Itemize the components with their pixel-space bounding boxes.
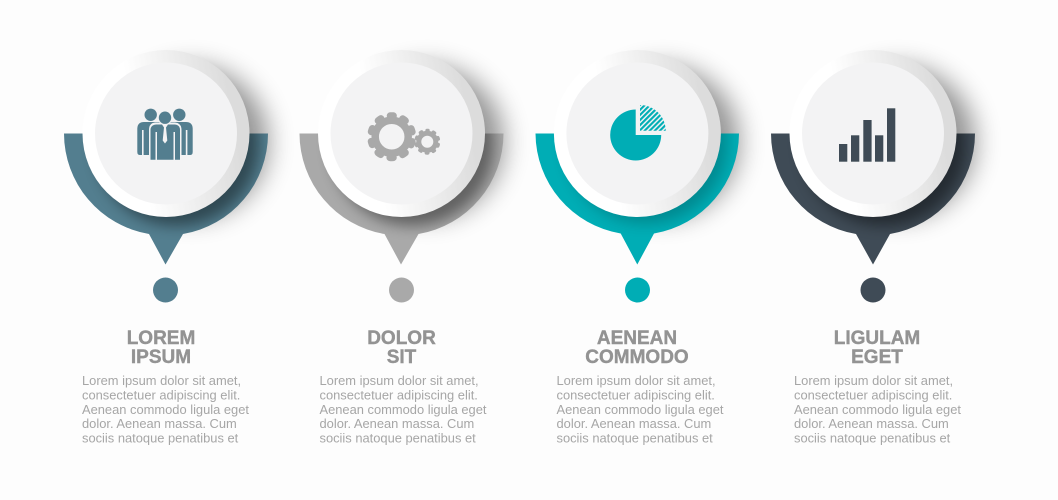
text block: Lorem ipsum dolor sit amet, xyxy=(82,373,241,388)
panel: aenean commodo xyxy=(536,50,739,446)
text block: Aenean commodo ligula eget xyxy=(556,402,724,417)
button xyxy=(554,50,721,217)
button xyxy=(82,50,250,217)
pin band xyxy=(771,134,975,264)
text block: dolor. Aenean massa. Cum xyxy=(320,416,474,431)
soft cast shadow xyxy=(352,66,504,218)
panel: dolor sit xyxy=(300,50,504,446)
text block: sociis natoque penatibus et xyxy=(82,430,239,446)
heading: DOLOR xyxy=(367,328,436,349)
text block: Lorem ipsum dolor sit amet, xyxy=(794,373,953,388)
icon: pie chart xyxy=(610,105,666,160)
panel: lorem ipsum xyxy=(64,50,268,446)
heading: LIGULAM xyxy=(834,328,920,349)
text block: consectetuer adipiscing elit. xyxy=(556,388,715,402)
text block: Lorem ipsum dolor sit amet, xyxy=(556,373,716,388)
panel: ligulam eget xyxy=(771,50,975,446)
heading: EGET xyxy=(851,347,903,368)
text block: sociis natoque penatibus et xyxy=(794,430,951,446)
text block: Aenean commodo ligula eget xyxy=(794,402,961,417)
text block: dolor. Aenean massa. Cum xyxy=(794,416,949,431)
text block: consectetuer adipiscing elit. xyxy=(82,388,240,402)
text block: Aenean commodo ligula eget xyxy=(82,402,249,417)
button shadow on band xyxy=(94,134,266,233)
text block: dolor. Aenean massa. Cum xyxy=(82,416,237,431)
icon: bar chart xyxy=(839,108,895,162)
pin band xyxy=(536,134,739,264)
text block: sociis natoque penatibus et xyxy=(320,430,476,446)
heading: IPSUM xyxy=(131,347,191,368)
text block: sociis natoque penatibus et xyxy=(556,430,713,446)
button shadow on band xyxy=(328,134,502,234)
soft cast shadow xyxy=(587,66,739,218)
pin band xyxy=(300,134,504,264)
text block: Lorem ipsum dolor sit amet, xyxy=(320,373,479,388)
button shadow on band xyxy=(808,134,971,231)
icon: people xyxy=(137,109,193,161)
button shadow on band xyxy=(570,134,732,228)
heading: AENEAN xyxy=(597,328,677,349)
dot xyxy=(625,278,650,302)
soft cast shadow xyxy=(116,66,268,218)
dot xyxy=(153,278,178,302)
text block: Aenean commodo ligula eget xyxy=(320,402,487,417)
pin band xyxy=(64,134,268,264)
text block: consectetuer adipiscing elit. xyxy=(320,388,478,402)
heading: SIT xyxy=(387,347,417,368)
dot xyxy=(389,278,414,302)
heading: LOREM xyxy=(127,328,195,349)
icon: gears xyxy=(371,116,439,158)
button xyxy=(318,50,485,217)
button xyxy=(790,50,956,217)
heading: COMMODO xyxy=(585,347,689,368)
dot xyxy=(860,278,886,302)
soft cast shadow xyxy=(823,66,975,218)
text block: consectetuer adipiscing elit. xyxy=(794,388,952,402)
text block: dolor. Aenean massa. Cum xyxy=(556,416,711,431)
